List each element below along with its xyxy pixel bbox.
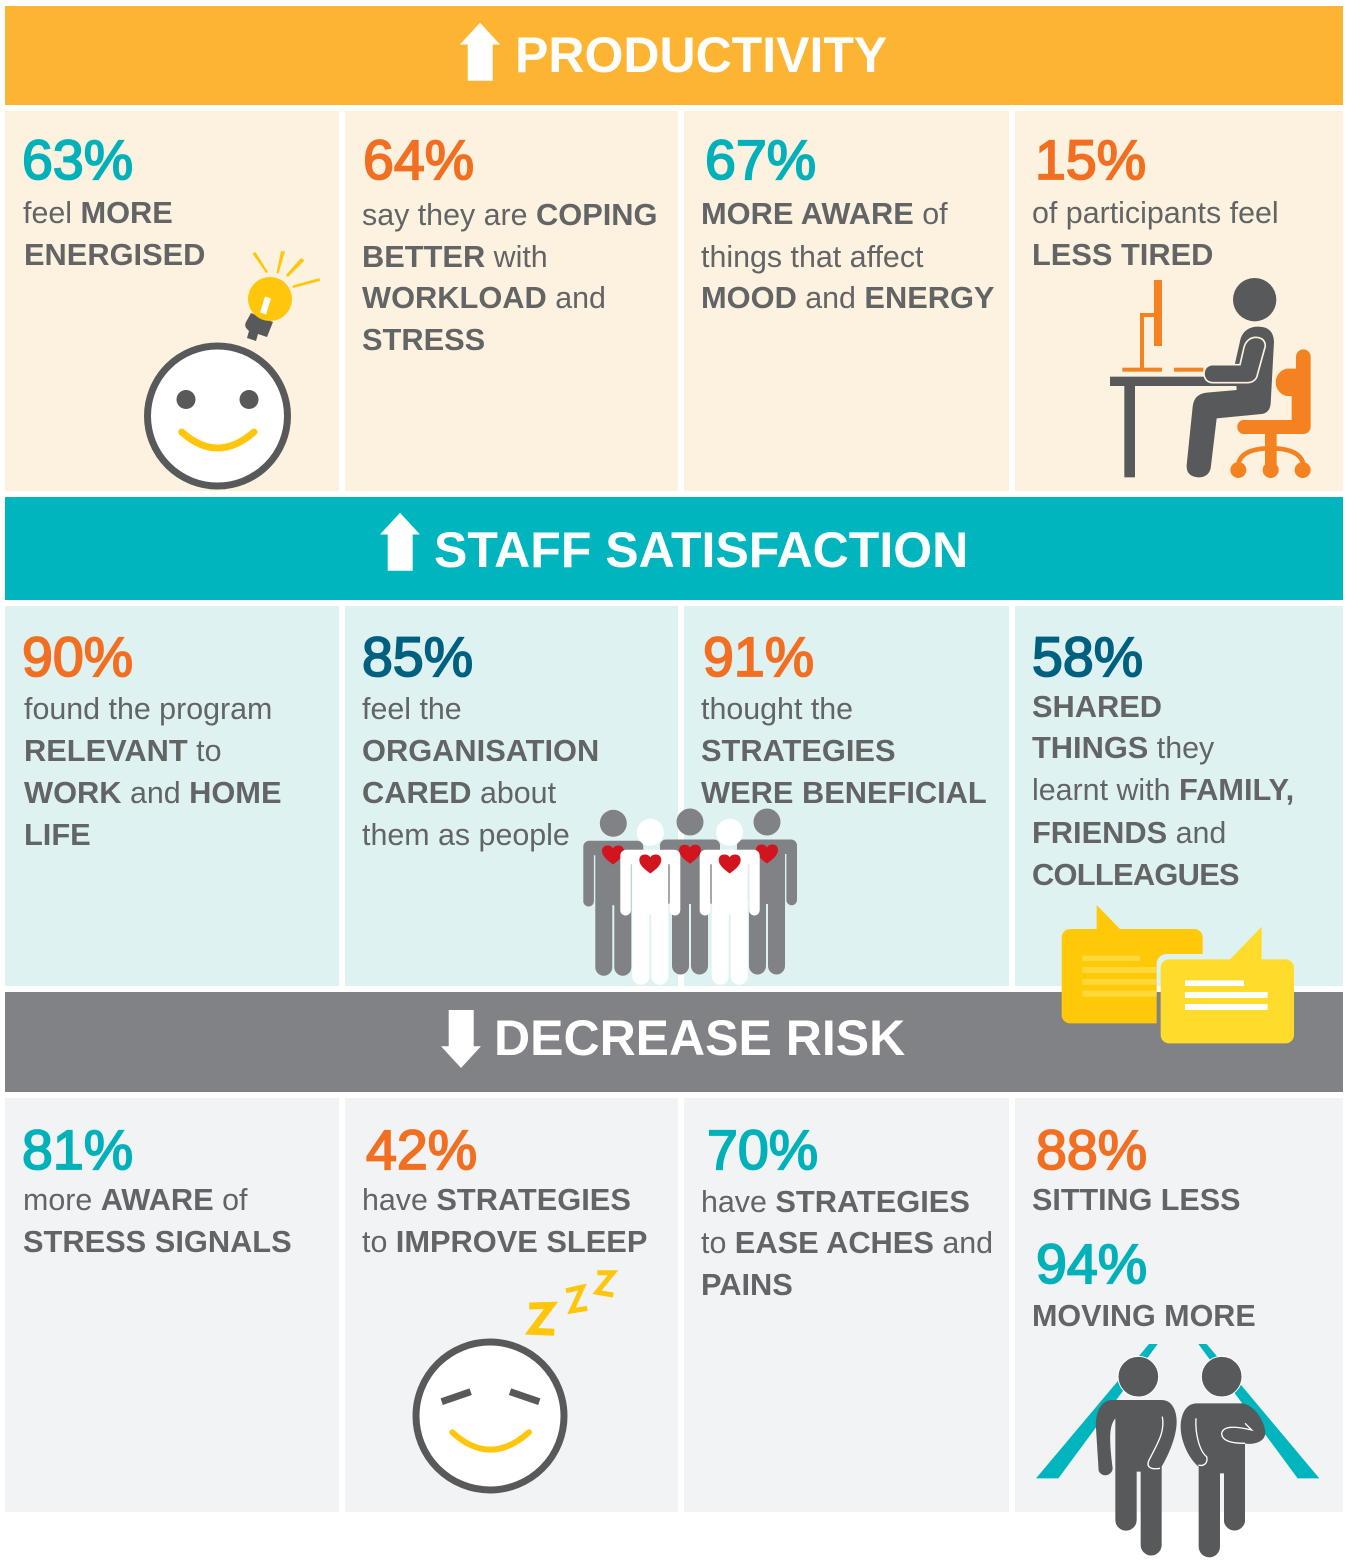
icon: up arrow — [380, 513, 420, 571]
text: more aware: and ENERGY — [805, 280, 994, 315]
text: coping better: BETTER — [362, 239, 485, 274]
text: organisation cared: ORGANISATION — [362, 733, 599, 768]
text: less tired: LESS TIRED — [1032, 237, 1213, 272]
text: coping better: say they are COPING — [362, 197, 658, 232]
panel: 15% less tired — [1015, 111, 1343, 491]
panel: 88% sitting less, 94% moving more — [1015, 1098, 1343, 1557]
text: shared things: COLLEAGUES — [1032, 857, 1239, 892]
text: organisation cared: about — [480, 776, 556, 810]
panel: 63% more energised — [5, 111, 339, 491]
text: strategies beneficial: WERE BENEFICIAL — [701, 775, 987, 810]
stat: 42%: 42% — [366, 1119, 477, 1181]
icon: walking people — [1036, 1344, 1319, 1557]
stat: 91%: 91% — [703, 626, 814, 688]
stat: 67%: 67% — [705, 129, 816, 191]
text: coping better: with — [494, 240, 548, 274]
icon: speech bubbles — [1062, 905, 1294, 1043]
stat: 85%: 85% — [362, 626, 473, 688]
stat: 70%: 70% — [707, 1119, 818, 1181]
text: relevant: WORK — [24, 775, 122, 810]
text: ease aches: to — [701, 1226, 735, 1260]
stat: 58%: 58% — [1032, 626, 1143, 688]
text: relevant: and HOME — [130, 775, 282, 810]
stat: 88%: 88% — [1036, 1119, 1147, 1181]
text: improve sleep: have STRATEGIES — [362, 1182, 631, 1217]
text: shared things: FAMILY, — [1179, 772, 1294, 807]
text: coping better: STRESS — [362, 322, 485, 357]
stat: 81%: 81% — [22, 1119, 133, 1181]
text: organisation cared: CARED — [362, 775, 472, 810]
panel: 81% stress signals — [5, 1098, 339, 1512]
header: productivity — [5, 6, 1343, 105]
text: stress signals: more AWARE of — [23, 1182, 247, 1217]
stat: 64%: 64% — [363, 129, 474, 191]
text: more aware: MOOD — [701, 280, 797, 315]
panel: 64% coping better — [345, 111, 678, 491]
text: ease aches: PAINS — [701, 1267, 793, 1302]
text: feel more energised: feel MORE — [23, 195, 173, 230]
text: coping better: WORKLOAD — [362, 280, 547, 315]
heading: productivity: PRODUCTIVITY — [515, 27, 887, 83]
text: feel more energised: ENERGISED — [24, 237, 205, 272]
icon: group of people with hearts — [583, 808, 797, 985]
panel: 70% ease aches — [684, 1098, 1009, 1512]
panel: 67% more aware — [684, 111, 1009, 491]
text: more aware: MORE AWARE of — [701, 196, 948, 231]
stat: 63%: 63% — [22, 129, 133, 191]
panel: 42% improve sleep — [345, 1098, 678, 1512]
text: relevant: found the program — [24, 692, 272, 726]
heading: staff satisfaction: STAFF SATISFACTION — [434, 522, 968, 578]
stat: 15%: 15% — [1035, 129, 1146, 191]
text: relevant: to — [196, 734, 221, 768]
panel: 91% strategies beneficial — [684, 606, 1009, 986]
panel: 85% organisation cared — [345, 606, 678, 986]
text: shared things: FRIENDS — [1032, 815, 1167, 850]
header: staff satisfaction — [5, 497, 1343, 600]
text: relevant: RELEVANT — [24, 733, 188, 768]
text: organisation cared: them as people — [362, 818, 570, 852]
stat: 94%: 94% — [1036, 1233, 1147, 1295]
icon: smiley with light bulb — [148, 251, 320, 486]
text: sitting less: SITTING LESS — [1032, 1183, 1240, 1217]
text: shared things: they — [1157, 731, 1214, 765]
stat: 90%: 90% — [22, 626, 133, 688]
text: organisation cared: feel the — [362, 692, 462, 726]
icon: sleeping face — [416, 1273, 613, 1490]
icon: down arrow — [441, 1010, 481, 1068]
text: coping better: and — [555, 281, 606, 315]
text: relevant: LIFE — [24, 817, 91, 852]
text: shared things: THINGS — [1032, 730, 1148, 765]
icon: person at desk — [1110, 278, 1311, 478]
icon: up arrow — [460, 23, 500, 81]
text: moving more: MOVING MORE — [1032, 1299, 1256, 1333]
text: more aware: things that affect — [701, 240, 924, 274]
text: shared things: learnt with — [1032, 773, 1179, 807]
text: stress signals: STRESS SIGNALS — [23, 1224, 292, 1259]
text: strategies beneficial: STRATEGIES — [701, 733, 896, 768]
text: strategies beneficial: thought the — [701, 692, 853, 726]
text: ease aches: EASE ACHES and — [735, 1225, 993, 1260]
text: less tired: of participants feel — [1032, 196, 1279, 230]
heading: decrease risk: DECREASE RISK — [494, 1010, 905, 1066]
text: shared things: SHARED — [1032, 689, 1162, 724]
text: shared things: and — [1176, 816, 1226, 850]
header: decrease risk — [5, 992, 1343, 1092]
text: improve sleep: IMPROVE SLEEP — [396, 1224, 647, 1259]
panel: 90% relevant — [5, 606, 339, 986]
text: improve sleep: to — [362, 1225, 396, 1259]
panel: 58% shared — [1015, 606, 1343, 986]
text: ease aches: have STRATEGIES — [701, 1184, 970, 1219]
